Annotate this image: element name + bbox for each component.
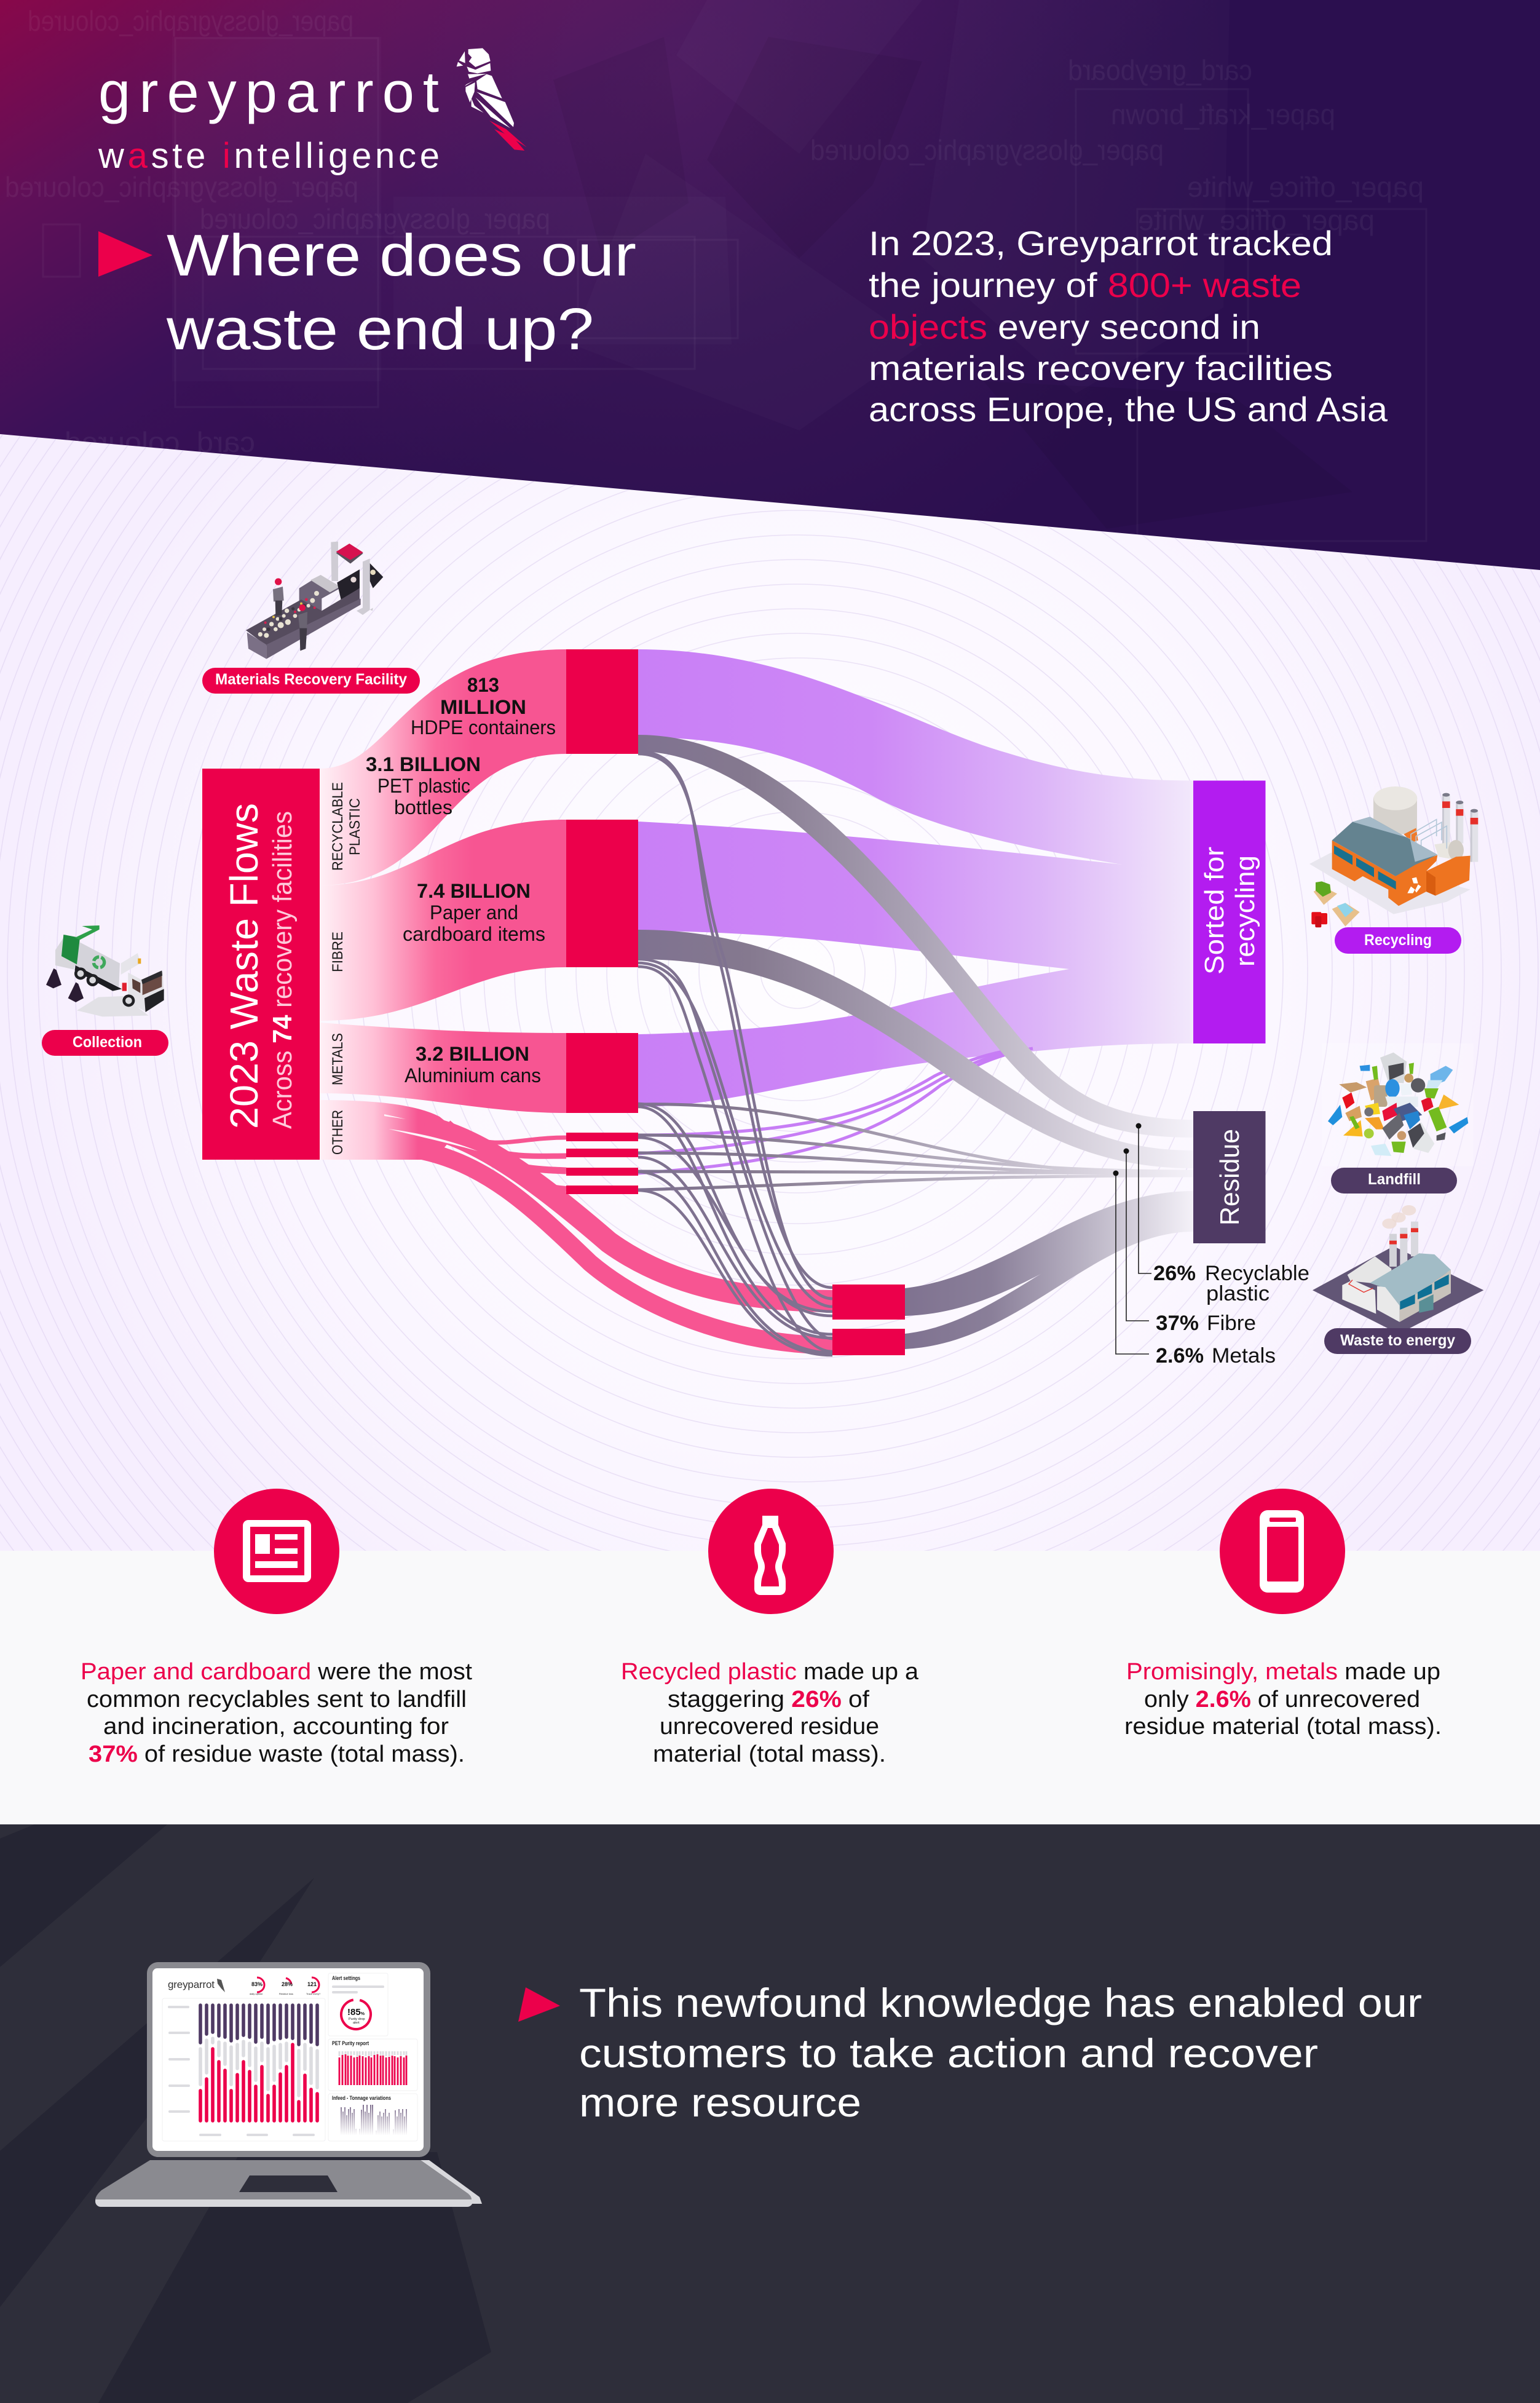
text: 813 million HDPE: MILLION [440, 696, 526, 718]
callout: residue composition: Metals [1212, 1344, 1276, 1368]
icon: newspaper [214, 1489, 339, 1614]
pill: waste to energy: Waste to energy [1340, 1332, 1455, 1349]
labels: material categories: OTHER [330, 1110, 346, 1155]
text: 3.2 billion aluminium: 3.2 BILLION [416, 1043, 529, 1065]
callout: residue composition: Recyclable [1205, 1262, 1309, 1285]
flows to sorted for recycling [638, 649, 1193, 1107]
text block: metals [1124, 1659, 1442, 1740]
text block: recycled plastic: Recycled plastic made up a [621, 1659, 919, 1685]
laptop screen [147, 1962, 430, 2157]
gauges: 28% [282, 1981, 293, 1987]
text: 813 million HDPE [411, 674, 556, 738]
card: infeed tonnage variations [328, 2094, 417, 2141]
callout: residue composition: 2.6% [1156, 1344, 1204, 1368]
icon: landfill waste pile [1322, 1043, 1474, 1166]
card: alert settings: !85% [347, 2007, 365, 2017]
icon: parrot [457, 48, 527, 151]
nodes: materials [566, 649, 905, 1355]
logo wordmark: greyparrot [98, 60, 439, 124]
labels: material categories: METALS [330, 1033, 346, 1085]
panel: header background: paper_glossygraphic_coloured [200, 203, 550, 235]
gauges: daily uptime [250, 1992, 263, 1995]
text block: paper and cardboard: common recyclables sent to landfill [87, 1687, 467, 1712]
laptop base [95, 2160, 482, 2207]
text block: intro: In 2023, Greyparrot tracked [869, 224, 1333, 263]
title: waste end up? [166, 296, 594, 362]
text block: closing statement: This newfound knowledge has enabled our [579, 1980, 1422, 2025]
icon: laptop with dashboard [95, 1962, 482, 2207]
node: residue [1193, 1111, 1265, 1243]
text block: intro: objects every second in [869, 307, 1260, 346]
flow: other [320, 1100, 832, 1345]
pill: materials recovery facility [202, 668, 420, 694]
pill: materials recovery facility: Materials Recovery Facility [215, 671, 407, 688]
heading: 2023 waste flows: 2023 Waste Flows [222, 803, 266, 1129]
text: 3.1 billion PET: 3.1 BILLION [366, 753, 481, 775]
labels: material categories [330, 782, 363, 1155]
chart: sankey flows [320, 649, 1193, 1355]
text: 7.4 billion paper: cardboard items [403, 923, 545, 945]
card: alert settings: alert [353, 2021, 360, 2025]
text: 7.4 billion paper: 7.4 BILLION [417, 880, 531, 902]
callout: residue composition: Fibre [1207, 1312, 1256, 1335]
labels: material categories: FIBRE [330, 932, 346, 972]
thin residue strands [638, 1104, 1193, 1190]
text block: recycled plastic: staggering 26% of [668, 1687, 869, 1712]
text block: paper and cardboard: Paper and cardboard were the most [81, 1659, 472, 1685]
logo: greyparrot [98, 48, 527, 176]
icon: title triangle [98, 231, 152, 277]
text block: closing statement [579, 1980, 1422, 2125]
panel: header background: card_greyboard [1068, 54, 1252, 86]
labels: material categories: PLASTIC [347, 798, 363, 855]
card: alert settings: Purity drop [349, 2017, 365, 2021]
text block: metals: Promisingly, metals made up [1126, 1659, 1440, 1685]
text: 3.1 billion PET: bottles [394, 796, 452, 818]
callout: residue composition: 37% [1156, 1312, 1199, 1335]
chart: main stacked bars [162, 1998, 325, 2141]
panel: header background [0, 0, 1540, 572]
card: infeed tonnage variations: Infeed - Tonnage variations [332, 2095, 391, 2101]
text: 3.2 billion aluminium: Aluminium cans [405, 1064, 541, 1087]
panel: header background: paper_office_white [1187, 171, 1424, 203]
card: PET purity report: PET Purity report [332, 2040, 369, 2046]
callout: residue composition: 26% [1153, 1262, 1196, 1285]
panel: dark footer background [0, 1824, 1540, 2403]
logo tagline: waste intelligence [98, 136, 440, 176]
panel: 2023 waste flows [202, 769, 320, 1160]
text: 813 million HDPE: 813 [467, 674, 499, 696]
card: PET purity report [328, 2039, 417, 2091]
title [166, 223, 636, 362]
text: 7.4 billion paper [403, 880, 545, 945]
pill: collection: Collection [73, 1034, 142, 1051]
text block: intro: materials recovery facilities [869, 349, 1333, 387]
subheading: across 74 recovery facilities: Across 74 recovery facilities [267, 811, 298, 1129]
pill: recycling [1335, 927, 1461, 954]
gauges [250, 1977, 321, 1995]
icon: can [1220, 1489, 1345, 1614]
thin strands to lower nodes [638, 751, 832, 1355]
text block: paper and cardboard: 37% of residue waste (total mass). [89, 1741, 465, 1767]
thin recycling strands [638, 1048, 1033, 1173]
text block: paper and cardboard: and incineration, accounting for [103, 1714, 449, 1740]
flows to residue [638, 735, 1193, 1168]
text: 3.1 billion PET [366, 753, 481, 818]
pill: waste to energy [1324, 1328, 1471, 1354]
text block: metals: only 2.6% of unrecovered [1144, 1687, 1420, 1712]
text: 7.4 billion paper: Paper and [430, 901, 518, 924]
pill: recycling: Recycling [1364, 932, 1432, 949]
panel: header background: paper_office_white [1138, 204, 1375, 236]
panel: header background: paper_kraft_brown [1111, 98, 1335, 130]
text: 813 million HDPE: HDPE containers [411, 716, 556, 738]
icon: footer triangle [518, 1987, 560, 2022]
text block: closing statement: customers to take action and recover [579, 2030, 1318, 2076]
gauges: 121 [307, 1981, 317, 1987]
node: sorted for recycling: Sorted for [1199, 847, 1230, 975]
node: sorted for recycling [1193, 781, 1265, 1043]
flows from collection to materials [320, 649, 566, 1113]
icon: waste to energy plant [1313, 1205, 1483, 1334]
text block: closing statement: more resource [579, 2080, 861, 2125]
text: 3.1 billion PET: PET plastic [377, 775, 470, 797]
node: residue: Residue [1215, 1129, 1245, 1225]
title: Where does our [167, 223, 636, 288]
text block: recycled plastic: unrecovered residue [660, 1714, 879, 1740]
icon: materials recovery facility [246, 542, 383, 659]
text block: metals: residue material (total mass). [1124, 1714, 1442, 1740]
node: sorted for recycling: recycling [1230, 855, 1260, 967]
card: alert settings [328, 1973, 388, 2036]
gauges: 83% [251, 1981, 263, 1987]
text block: intro [869, 224, 1388, 429]
text block: intro: across Europe, the US and Asia [869, 390, 1388, 429]
panel: header background: card_coloured [65, 426, 255, 458]
labels: material categories: RECYCLABLE [330, 782, 346, 871]
card: alert settings: Alert settings [332, 1975, 360, 1981]
text block: recycled plastic [621, 1659, 919, 1767]
pill: landfill [1331, 1168, 1457, 1194]
dashboard logo: greyparrot [168, 1979, 215, 1990]
text block: intro: the journey of 800+ waste [869, 266, 1301, 304]
pill: collection [42, 1030, 168, 1056]
text block: paper and cardboard [81, 1659, 472, 1767]
panel: sankey background [0, 434, 1540, 1551]
pill: landfill: Landfill [1368, 1171, 1421, 1188]
callout: residue composition [1113, 1123, 1309, 1368]
text: 3.2 billion aluminium [405, 1043, 541, 1087]
icon: bottle [708, 1489, 834, 1614]
icon: recycling plant [1309, 786, 1478, 927]
text block: recycled plastic: material (total mass). [653, 1741, 886, 1767]
icon: collection truck [46, 925, 164, 1016]
gauges: Residue loss [279, 1992, 293, 1995]
panel: recyclables stats background [0, 1551, 1540, 1824]
gauges: Trace every? [306, 1992, 321, 1995]
panel: header background: paper_glossygraphic_coloured [810, 134, 1164, 166]
callout: residue composition: plastic [1206, 1282, 1270, 1305]
